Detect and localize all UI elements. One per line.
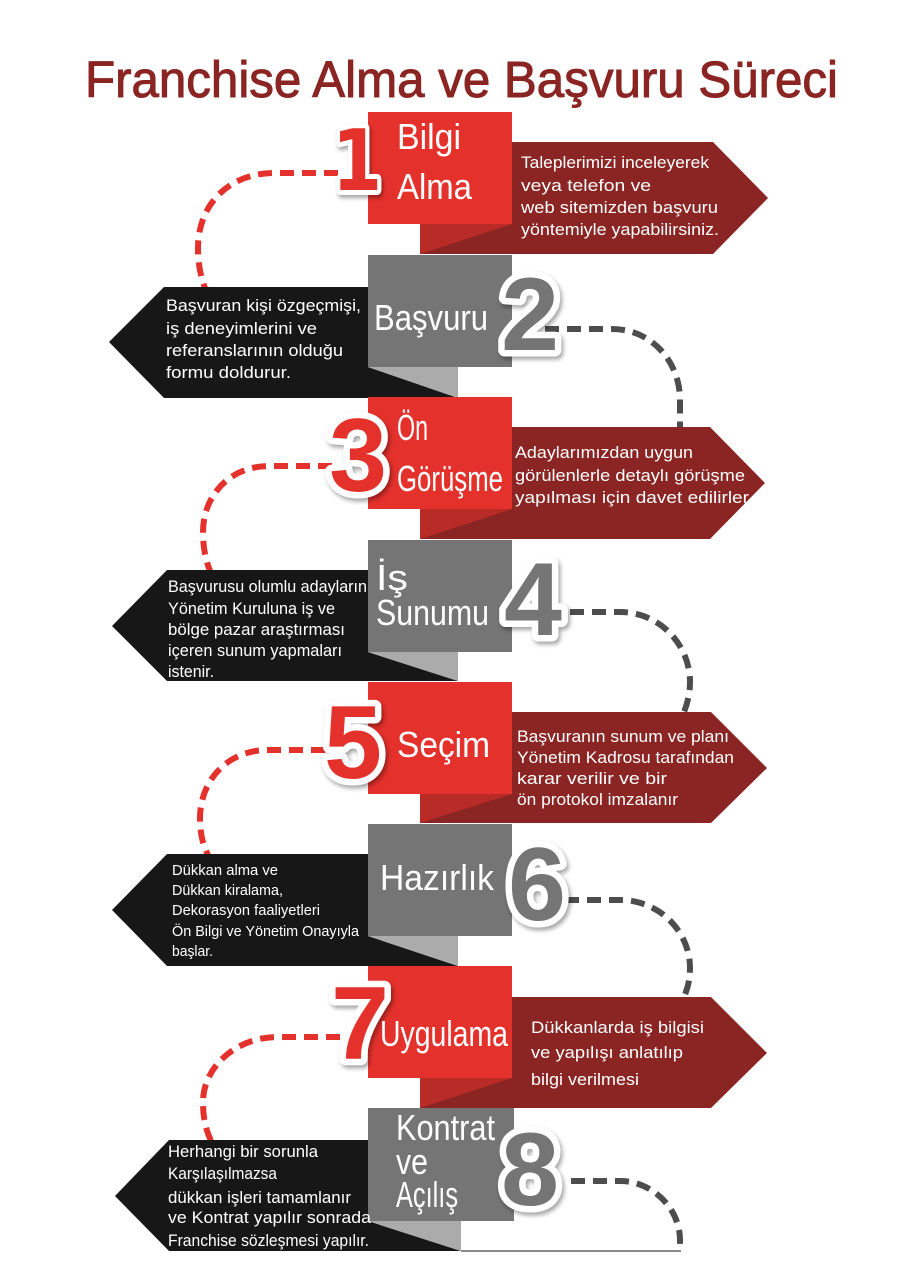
number 2: 2 [501, 257, 559, 373]
step square 5 [368, 682, 512, 794]
baseline rule [461, 1250, 681, 1252]
arrow panel 4 [112, 570, 458, 681]
description 3: yapılması için davet edilirler [515, 489, 750, 507]
description 8 [168, 1143, 372, 1250]
description 7: Dükkanlarda iş bilgisi [531, 1019, 704, 1037]
step square 2 [368, 255, 512, 367]
description 1 [520, 154, 719, 239]
description 1: veya telefon ve [521, 177, 651, 195]
heading 1 [397, 116, 473, 207]
number 4: 4 [504, 542, 562, 658]
number 7: 7 [331, 966, 389, 1082]
step square 3 [368, 397, 512, 509]
heading 3: Görüşme [397, 458, 503, 499]
description 1: web sitemizden başvuru [520, 199, 718, 217]
connector 4 [570, 612, 690, 712]
heading 5: Seçim [397, 724, 490, 765]
description 8: Herhangi bir sorunla [168, 1143, 319, 1161]
description 2: formu doldurur. [166, 364, 291, 382]
step square 1 [368, 112, 512, 224]
step square 7 [368, 966, 512, 1078]
heading 4 [376, 557, 489, 633]
heading 1: Bilgi [397, 116, 461, 157]
connector 1 [198, 173, 338, 288]
panel: step 5 Seçim [200, 682, 767, 855]
fold 3 [420, 509, 512, 539]
panel: step 7 Uygulama [203, 966, 767, 1141]
fold 5 [420, 794, 512, 823]
description 6: Dekorasyon faaliyetleri [172, 902, 320, 919]
heading 1: Alma [397, 166, 473, 207]
description 4: içeren sunum yapmaları [168, 642, 342, 660]
description 4: bölge pazar araştırması [168, 621, 345, 639]
description 5: ön protokol imzalanır [517, 791, 679, 809]
panel: step 2 Başvuru [109, 255, 680, 428]
heading 8: ve [396, 1141, 428, 1182]
number 1: 1 [332, 111, 382, 210]
arrow panel 3 [420, 427, 765, 539]
connector 8 [571, 1181, 680, 1250]
panel: step 4 İş Sunumu [112, 540, 690, 712]
fold 6 [368, 936, 458, 966]
panel: step 6 Hazırlık [112, 824, 690, 997]
heading 2: Başvuru [374, 297, 488, 338]
heading 4: Sunumu [376, 592, 489, 633]
description 5: karar verilir ve bir [517, 770, 668, 788]
arrow panel 5 [420, 712, 767, 823]
arrow panel 1 [420, 142, 768, 254]
description 2: referanslarının olduğu [166, 342, 343, 360]
description 6: Dükkan alma ve [172, 862, 278, 879]
arrow panel 2 [109, 287, 458, 398]
description 6: Ön Bilgi ve Yönetim Onayıyla [172, 922, 360, 940]
description 2: iş deneyimlerini ve [166, 320, 317, 338]
heading 4: İş [376, 557, 408, 598]
fold 7 [420, 1078, 512, 1108]
description 5: Yönetim Kadrosu tarafından [517, 749, 734, 767]
description 7 [531, 1019, 704, 1089]
description 3: görülenlerle detaylı görüşme [515, 467, 745, 485]
number 6: 6 [508, 827, 566, 943]
description 6: başlar. [172, 943, 213, 960]
number 5: 5 [324, 685, 382, 801]
connector 6 [565, 900, 690, 997]
step square 8 [368, 1108, 514, 1221]
description 4 [168, 578, 367, 681]
description 6 [172, 862, 360, 960]
panel: step 3 Ön Görüşme [203, 397, 765, 571]
arrow panel 7 [420, 997, 767, 1108]
description 7: ve yapılışı anlatılıp [531, 1044, 683, 1062]
description 4: Yönetim Kuruluna iş ve [168, 600, 335, 618]
description 2 [166, 297, 361, 382]
heading 7: Uygulama [380, 1013, 509, 1054]
description 4: Başvurusu olumlu adayların [168, 578, 367, 596]
description 5 [517, 728, 734, 809]
fold 2 [368, 367, 458, 398]
description 8: Franchise sözleşmesi yapılır. [168, 1232, 369, 1250]
panel: step 8 Kontrat ve Açılış [115, 1107, 681, 1252]
arrow panel 6 [112, 854, 458, 966]
heading 3: Ön [397, 407, 428, 448]
step square 6 [368, 824, 512, 936]
description 8: dükkan işleri tamamlanır [168, 1189, 352, 1207]
title: Franchise Alma ve Başvuru Süreci [85, 51, 838, 108]
arrow panel 8 [115, 1140, 461, 1251]
panel: step 1 Bilgi Alma [198, 111, 768, 288]
description 2: Başvuran kişi özgeçmişi, [166, 297, 361, 315]
step square 4 [368, 540, 512, 652]
description 8: ve Kontrat yapılır sonrada [168, 1209, 372, 1227]
description 3: Adaylarımızdan uygun [515, 444, 693, 462]
number 8: 8 [501, 1112, 559, 1228]
description 5: Başvuranın sunum ve planı [517, 728, 729, 746]
number 3: 3 [329, 398, 387, 514]
fold 1 [420, 224, 512, 254]
description 7: bilgi verilmesi [531, 1071, 639, 1089]
heading 8 [396, 1107, 495, 1215]
description 1: Taleplerimizi inceleyerek [521, 154, 710, 172]
heading 6: Hazırlık [380, 857, 495, 898]
connector 2 [545, 329, 680, 428]
fold 8 [368, 1221, 461, 1251]
description 1: yöntemiyle yapabilirsiniz. [521, 221, 719, 239]
connector 3 [203, 466, 332, 571]
description 6: Dükkan kiralama, [172, 882, 283, 899]
fold 4 [368, 652, 458, 681]
connector 7 [203, 1037, 340, 1141]
description 4: istenir. [168, 663, 214, 681]
description 3 [515, 444, 750, 507]
heading 8: Kontrat [396, 1107, 495, 1148]
heading 3 [397, 407, 503, 499]
connector 5 [200, 750, 325, 855]
description 8: Karşılaşılmazsa [168, 1165, 278, 1183]
heading 8: Açılış [396, 1174, 458, 1215]
